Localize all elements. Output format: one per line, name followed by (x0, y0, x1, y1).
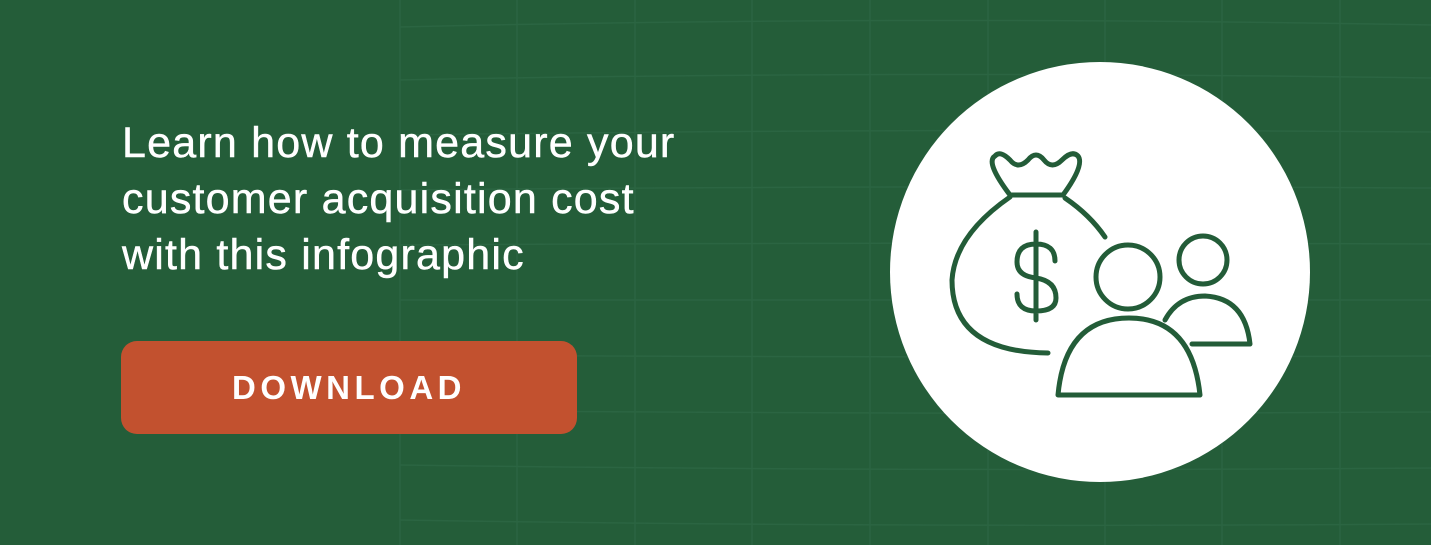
button: download: DOWNLOAD (232, 369, 466, 406)
button: download (121, 341, 577, 434)
heading: Learn how to measure your (122, 119, 675, 167)
heading: customer acquisition cost (122, 175, 635, 223)
heading (122, 119, 675, 279)
heading: with this infographic (122, 231, 525, 279)
